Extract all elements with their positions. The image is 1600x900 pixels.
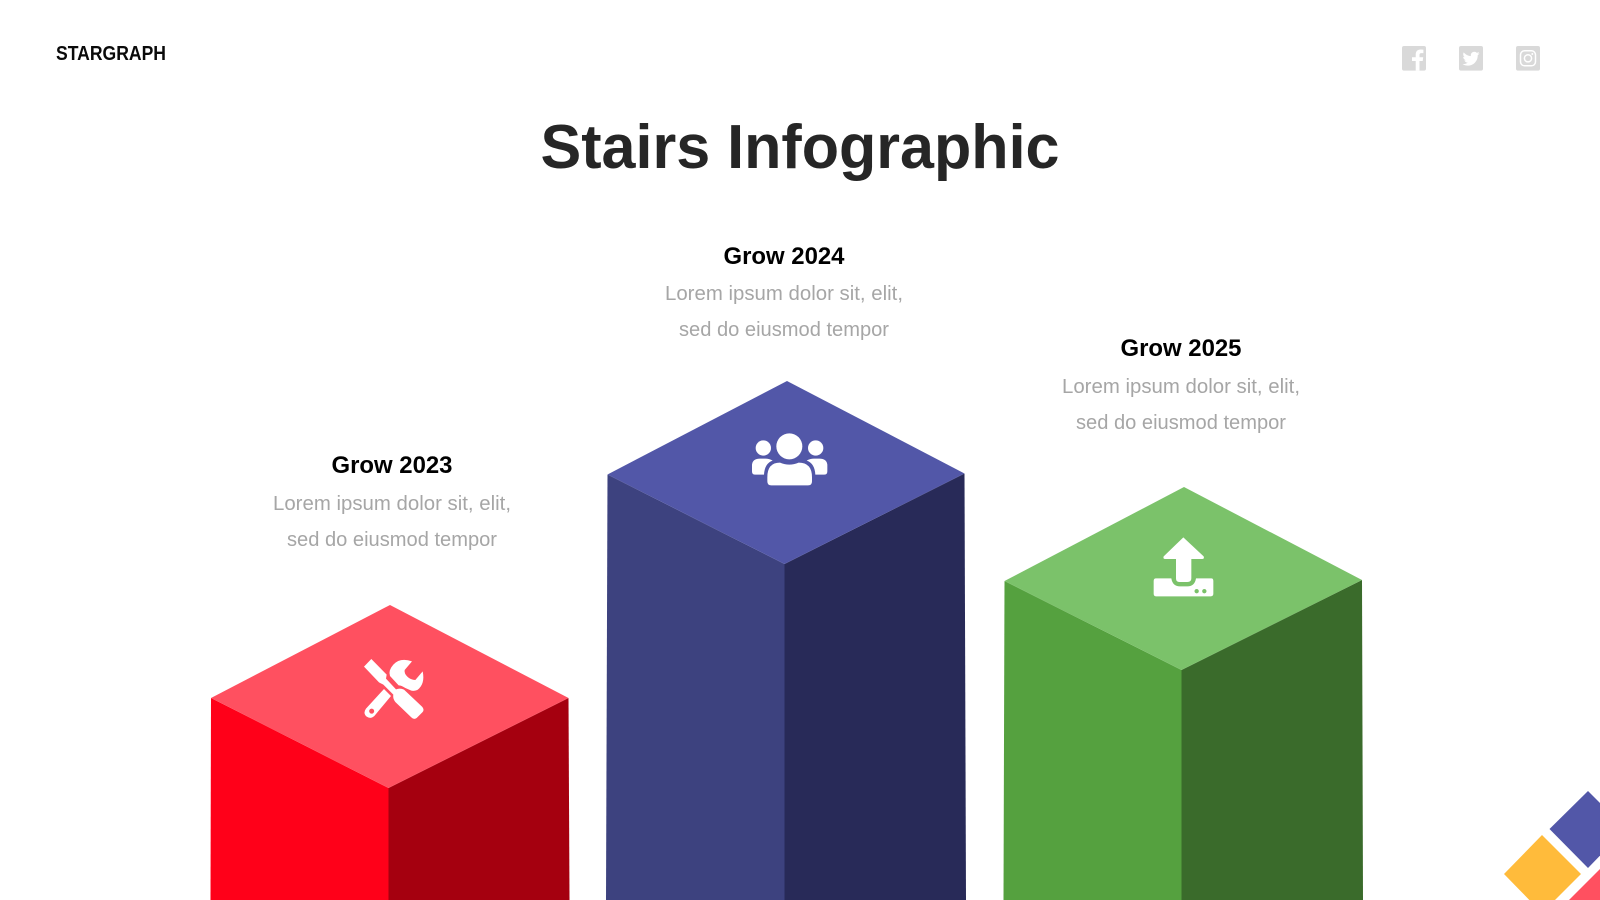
icon: people [752,433,827,485]
panel: grow 2023 text: Lorem ipsum dolor sit, elit, [273,493,511,515]
panel: grow 2025 text: Grow 2025 [1120,335,1242,362]
panel: red stair block [210,605,570,900]
panel: grow 2024 text: Grow 2024 [724,243,845,270]
panel: grow 2025 text [1062,335,1300,434]
panel: grow 2024 text [665,243,903,341]
social icons [1402,46,1540,71]
panel: grow 2023 text: Grow 2023 [332,452,452,479]
panel: grow 2025 text: Lorem ipsum dolor sit, elit, [1062,376,1300,398]
icon: upload [1154,537,1213,596]
brand logo: STARGRAPH [56,43,166,65]
icon: instagram [1516,46,1540,71]
panel: grow 2024 text: sed do eiusmod tempor [679,319,889,341]
icon: facebook [1402,46,1426,71]
decoration: corner diamonds [1504,791,1600,900]
icon: twitter [1459,46,1483,71]
panel: grow 2023 text [273,452,511,551]
panel: green stair block [1004,487,1363,900]
panel: grow 2024 text: Lorem ipsum dolor sit, elit, [665,283,903,305]
title: Stairs Infographic [540,113,1060,182]
panel: grow 2025 text: sed do eiusmod tempor [1076,412,1286,434]
icon: tools [364,659,424,719]
panel: grow 2023 text: sed do eiusmod tempor [287,529,497,551]
panel: blue stair block [606,381,966,900]
